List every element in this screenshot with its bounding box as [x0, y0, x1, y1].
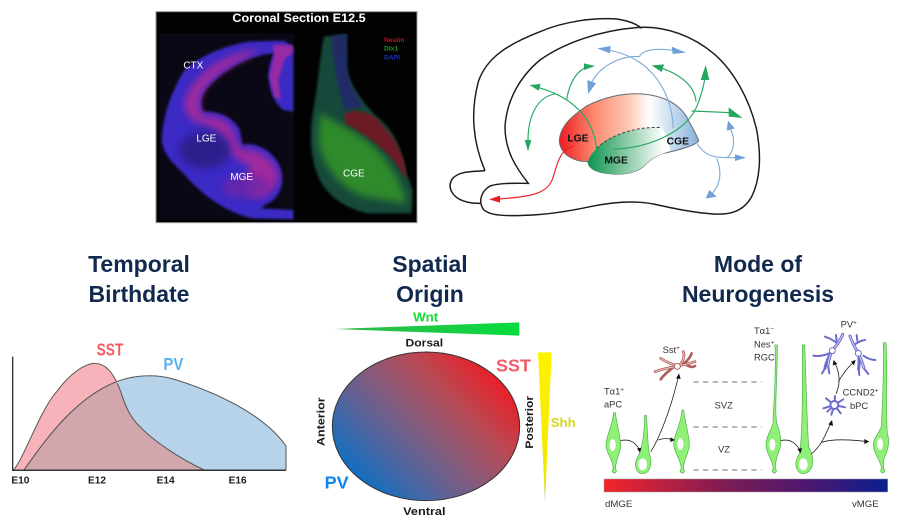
eminence labels: MGE: [604, 156, 628, 167]
label: vMGE: vMGE: [852, 499, 879, 509]
wedge: Shh gradient: [538, 352, 552, 503]
tissue: right section: [311, 34, 413, 213]
panel: temporal area chart: [11, 339, 286, 487]
legend: stains: [384, 37, 404, 61]
region labels: LGE: [196, 134, 217, 145]
eminence labels: CGE: [667, 136, 689, 147]
label: bPC: CCND2: [843, 387, 875, 397]
zone dashes: [693, 382, 762, 470]
label: dMGE: dMGE: [605, 499, 632, 509]
label: Sst: Sst: [663, 345, 677, 355]
legend: stains: Nestin: [384, 37, 404, 44]
label: bPC: bPC: [850, 401, 868, 411]
region labels: CGE: [343, 169, 365, 180]
diagram: brain migration routes: [450, 19, 759, 216]
label: Wnt: Wnt: [413, 309, 439, 324]
area: overlap: [24, 382, 202, 470]
zone labels: [715, 400, 733, 455]
label: Posterior: Posterior: [524, 395, 536, 449]
label: bPC: +: [875, 387, 879, 394]
label: PV: PV: [325, 473, 349, 493]
label: Shh: Shh: [551, 415, 576, 430]
axes: [13, 357, 286, 470]
area: SST: [13, 363, 204, 470]
brain outline: [450, 19, 759, 216]
area: PV: [24, 376, 286, 470]
zone labels: VZ: [718, 445, 730, 455]
cell: radial glia 2: [796, 345, 813, 474]
tissue: left section: [162, 41, 293, 219]
series label: PV: PV: [163, 354, 183, 374]
label: aPC: +: [620, 387, 624, 394]
gradient bar: dMGE to vMGE: [604, 479, 888, 492]
heading: temporal birthdate: Birthdate: [89, 281, 189, 307]
panel: spatial origin oval: [316, 309, 576, 518]
label: Dorsal: Dorsal: [405, 337, 443, 349]
oval: SST to PV gradient: [332, 352, 520, 501]
region labels: CTX: [183, 61, 204, 72]
heading: temporal birthdate: Temporal: [88, 251, 190, 277]
region labels: [183, 61, 365, 183]
cell: dividing apical progenitor: [635, 415, 651, 474]
eminence: MGE: [588, 127, 670, 174]
micrograph: coronal section E12.5: [156, 11, 417, 223]
label: Ventral: Ventral: [403, 506, 445, 518]
red migration arrow: [489, 146, 575, 203]
eminence labels: LGE: [567, 133, 589, 144]
neuron: PV right: [850, 335, 875, 375]
tick labels: [11, 476, 247, 487]
heading: mode of neurogenesis: Mode of: [714, 251, 802, 277]
neuron: bPC: [823, 396, 845, 415]
SST descending edge: [117, 383, 204, 470]
label: Sst: +: [676, 345, 680, 352]
eminence labels: [567, 133, 689, 167]
MGE boundary dashes: [597, 127, 662, 148]
label: RGC: RGC: [754, 352, 775, 362]
tick labels: E16: [229, 476, 247, 487]
label: aPC: Tα1: [604, 387, 620, 397]
label: RGC: −: [770, 326, 774, 333]
label: SST: SST: [496, 355, 531, 375]
series label: SST: SST: [97, 339, 123, 359]
heading: spatial origin: Spatial: [392, 251, 468, 277]
tick labels: E12: [88, 476, 106, 487]
tick labels: E10: [11, 476, 30, 487]
wedge: Wnt gradient: [333, 322, 519, 336]
label: RGC: Nes: [754, 339, 771, 349]
label: PV: PV: [841, 320, 854, 330]
zone labels: SVZ: [715, 400, 733, 410]
heading: mode of neurogenesis: Neurogenesis: [682, 281, 834, 307]
legend: stains: Dlx1: [384, 46, 398, 53]
green migration arrows: [525, 63, 743, 151]
neuron: PV left: [813, 334, 843, 373]
blue migration arrows: [587, 46, 746, 199]
arrows: [621, 360, 869, 454]
label: RGC: +: [771, 339, 775, 346]
cell: radial glia 3: [873, 343, 889, 473]
micrograph title: Coronal Section E12.5: [232, 11, 366, 25]
label: Anterior: Anterior: [316, 397, 328, 446]
eminences: LGE and CGE: [559, 94, 699, 174]
panel: mode of neurogenesis: [604, 320, 889, 509]
neuron: Sst: [655, 352, 695, 379]
label: aPC: aPC: [604, 399, 622, 409]
label: RGC: Tα1: [754, 326, 770, 336]
cell: apical progenitor 2: [674, 410, 689, 473]
legend: stains: DAPI: [384, 54, 400, 61]
cell: radial glia 1: [766, 345, 781, 473]
label: PV: +: [853, 320, 857, 327]
cell: apical progenitor 1: [606, 413, 621, 473]
region labels: MGE: [230, 172, 253, 183]
heading: spatial origin: Origin: [396, 281, 464, 307]
tick labels: E14: [157, 476, 175, 487]
